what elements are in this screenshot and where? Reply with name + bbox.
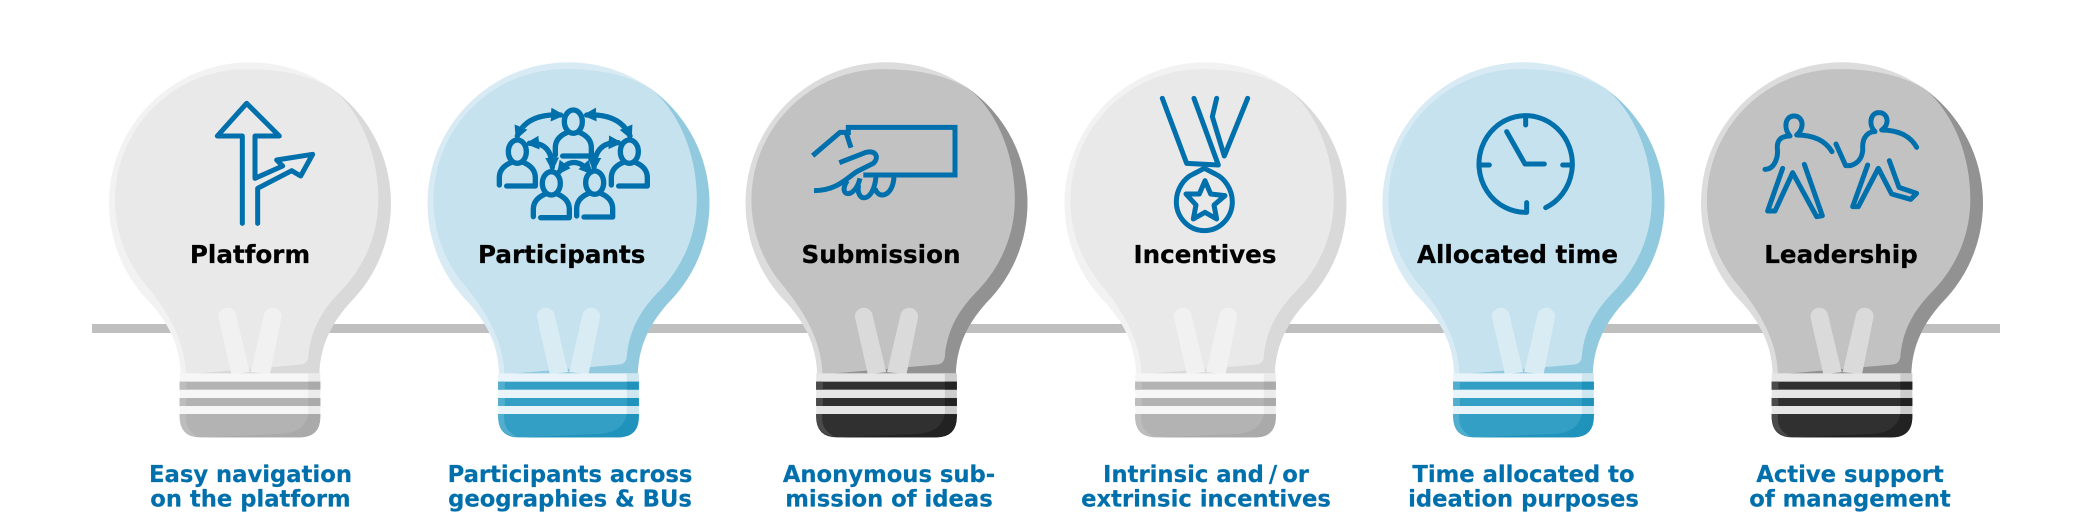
panel: participants [427,62,709,513]
text: allocated time description: Time allocated to [1412,462,1635,488]
heading: Participants: Participants [478,240,645,269]
icon: medal [1162,98,1248,231]
lightbulb: dark gray [1701,62,1983,437]
text: submission description: mission of ideas [785,486,993,512]
icon: diverging arrows [217,103,313,223]
heading: Leadership: Leadership [1764,240,1918,269]
lightbulb: gray [1064,62,1346,437]
text: platform description: Easy navigation [149,462,352,488]
heading: Incentives: Incentives [1134,240,1276,269]
icon: connected people [499,110,647,218]
text: incentives description: Intrinsic and/or [1103,462,1309,488]
icon: clock [1479,116,1572,212]
text: participants description: Participants across [448,462,692,488]
lightbulb: gray [109,62,391,437]
heading: Platform: Platform [190,240,310,269]
panel: allocated time [1382,62,1664,513]
lightbulb: dark gray [745,62,1027,437]
lightbulb: blue [1382,62,1664,437]
panel: incentives [1064,62,1346,513]
text: incentives description: extrinsic incentives [1081,486,1331,512]
text: leadership description: Active support [1756,462,1944,488]
text: participants description: geographies & BUs [448,486,692,512]
panel: platform [109,62,391,513]
icon: hand holding card [813,127,955,198]
panel: submission [745,62,1027,513]
text: leadership description: of management [1749,486,1951,512]
timeline line [92,324,2000,333]
panel: leadership [1701,62,1983,513]
text: submission description: Anonymous sub- [783,462,995,488]
text: allocated time description: ideation purposes [1408,486,1639,512]
lightbulb: blue [427,62,709,437]
heading: Submission: Submission [802,240,960,269]
icon: two people [1765,113,1917,217]
heading: Allocated time: Allocated time [1417,240,1618,269]
text: platform description: on the platform [150,486,351,512]
